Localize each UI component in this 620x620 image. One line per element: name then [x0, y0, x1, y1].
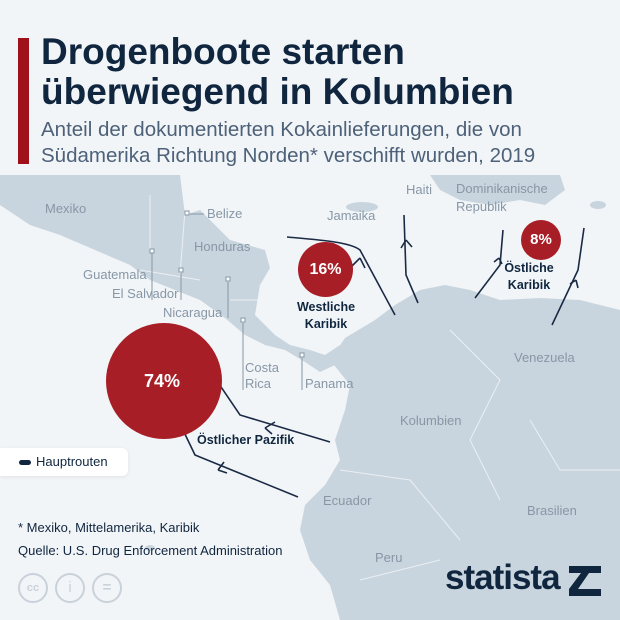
Galapagos: [145, 545, 155, 551]
text: Honduras: [194, 239, 250, 254]
South America: [300, 285, 620, 620]
bubble 8%: [521, 220, 561, 260]
cc icons: cc: [27, 582, 39, 594]
Mexico / Central America: [0, 175, 340, 372]
text: Nicaragua: [163, 305, 222, 320]
subtitle: [41, 118, 535, 167]
title: Drogenboote starten: [41, 31, 405, 72]
text: Rica: [245, 376, 271, 391]
bubble 74%: [106, 323, 222, 439]
footnote: [18, 520, 282, 558]
cc icons: =: [103, 579, 111, 596]
bubble 8%: 8%: [530, 231, 552, 248]
bubble 16%: [298, 242, 353, 297]
text: Ecuador: [323, 493, 371, 508]
region labels: [297, 300, 355, 331]
cc icons: [18, 573, 122, 603]
subtitle: Südamerika Richtung Norden* verschifft wurden, 2019: [41, 144, 535, 167]
text: Costa: [245, 360, 279, 375]
legend: Hauptrouten: [36, 454, 108, 469]
title bar: [18, 38, 29, 164]
text: Östlicher Pazifik: [197, 433, 294, 447]
Cuba / Hispaniola: [430, 175, 565, 205]
text: Östliche: [504, 261, 554, 275]
footnote: Quelle: U.S. Drug Enforcement Administration: [18, 543, 282, 558]
text: Brasilien: [527, 503, 577, 518]
text: Karibik: [508, 278, 550, 292]
text: Haiti: [406, 182, 432, 197]
text: El Salvador: [112, 286, 178, 301]
text: Mexiko: [45, 201, 86, 216]
region labels: Westliche: [297, 300, 355, 314]
text: Jamaika: [327, 208, 375, 223]
region labels: Karibik: [305, 317, 347, 331]
text: Republik: [456, 199, 507, 214]
legend: [0, 448, 128, 476]
statista logo: statista: [445, 558, 560, 597]
subtitle: Anteil der dokumentierten Kokainlieferungen, die von: [41, 118, 522, 141]
text: Panama: [305, 376, 353, 391]
bubble 16%: 16%: [309, 261, 342, 278]
text: Guatemala: [83, 267, 147, 282]
title: überwiegend in Kolumbien: [41, 71, 514, 112]
text: Peru: [375, 550, 402, 565]
title: [41, 31, 514, 112]
country labels: [45, 181, 577, 565]
Jamaica: [346, 202, 378, 212]
text: Venezuela: [514, 350, 575, 365]
bubble 74%: 74%: [144, 371, 180, 391]
routes: [170, 215, 584, 497]
text: Dominikanische: [456, 181, 548, 196]
text: Kolumbien: [400, 413, 461, 428]
footnote: * Mexiko, Mittelamerika, Karibik: [18, 520, 199, 535]
cc icons: i: [68, 579, 72, 596]
text: Belize: [207, 206, 242, 221]
